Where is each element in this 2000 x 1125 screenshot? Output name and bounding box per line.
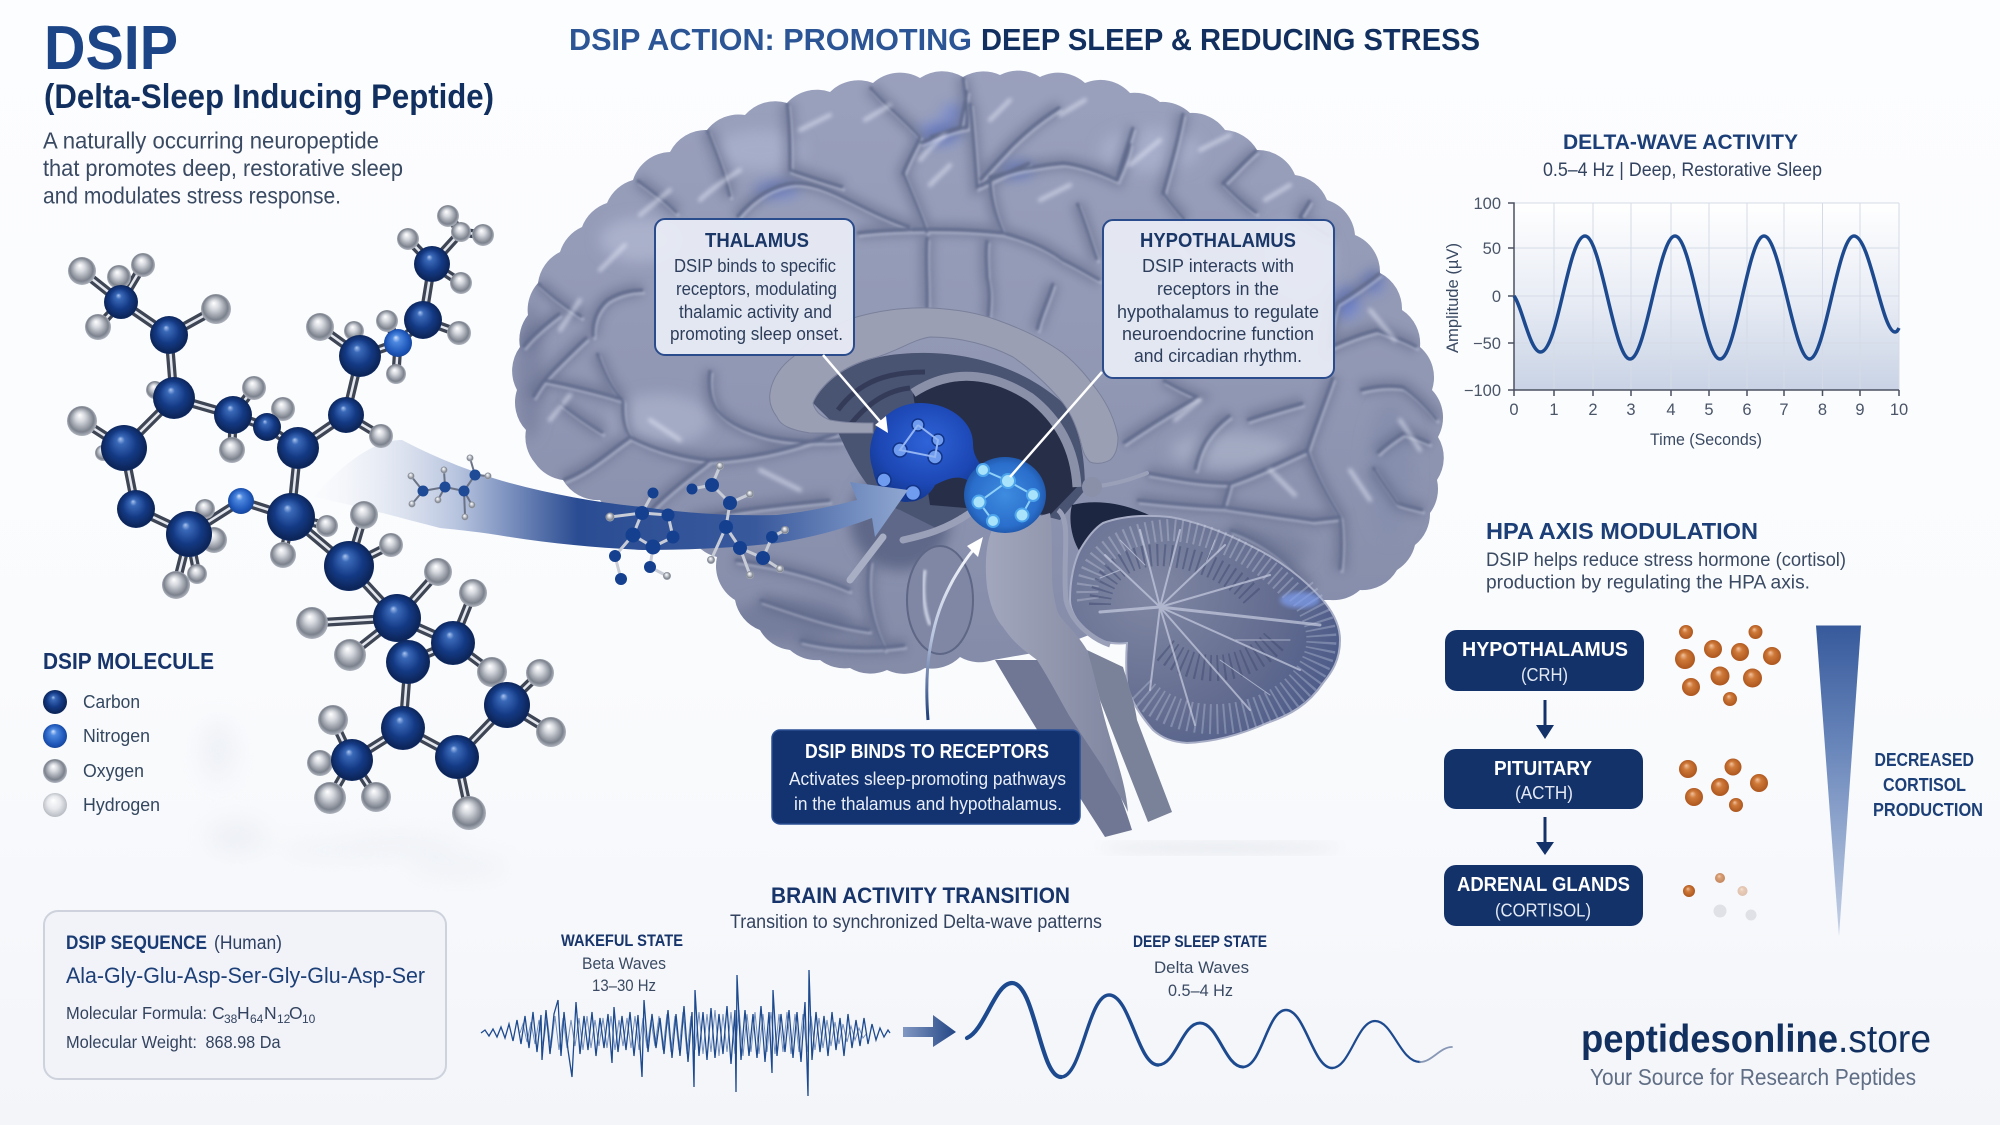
panel: delta-wave activity chart: DELTA-WAVE ACTIVITY [1563, 131, 1798, 154]
x-axis labels: 2 [1588, 401, 1598, 419]
main heading [569, 22, 1480, 57]
sulci depth shading [523, 77, 1437, 650]
wakeful state labels: 13–30 Hz [592, 976, 656, 995]
y-axis labels: −100 [1464, 382, 1501, 400]
brand logo: peptidesonline [1581, 1018, 1838, 1061]
inner chamber [913, 376, 1077, 515]
panel: molecule legend [43, 648, 214, 817]
pons [907, 546, 973, 654]
cerebellar ridges [1087, 530, 1321, 719]
x-axis labels: 8 [1818, 401, 1827, 419]
intro text: A naturally occurring neuropeptide [43, 128, 379, 154]
brainstem [986, 510, 1172, 837]
ventricle shading [838, 372, 925, 425]
brand logo: Your Source for Research Peptides [1590, 1064, 1916, 1090]
soft light and shade [516, 128, 1414, 642]
cerebrum [500, 60, 1460, 680]
optic tract [850, 473, 1147, 580]
panel: HPA axis: production by regulating the HPA axis. [1486, 572, 1810, 594]
panel: delta-wave activity chart: 0.5–4 Hz | Deep, Restorative Sleep [1543, 160, 1822, 181]
panel: sequence: N [264, 1003, 277, 1023]
x-axis labels: 10 [1890, 401, 1908, 419]
subtitle: full name: (Delta-Sleep Inducing Peptide) [44, 78, 494, 116]
cerebellum [1070, 516, 1340, 743]
decreased cortisol label [1873, 750, 1983, 820]
panel: sequence: 10 [302, 1012, 316, 1026]
thalamus binding site [870, 403, 985, 502]
y-axis labels: 0 [1492, 288, 1501, 306]
callout: DSIP binds to receptors: DSIP BINDS TO RECEPTORS [805, 741, 1049, 763]
box: adrenal glands [1444, 865, 1643, 926]
callout: hypothalamus: receptors in the [1157, 279, 1279, 299]
carbon atoms [101, 246, 530, 781]
y-axis labels: −50 [1473, 335, 1501, 353]
decreasing triangle [1816, 626, 1861, 936]
deep sleep state labels: Delta Waves [1154, 958, 1249, 977]
wakeful state labels: WAKEFUL STATE [561, 932, 683, 950]
callout: DSIP binds to receptors: Activates sleep-promoting pathways [789, 768, 1066, 789]
panel: brain activity transition [481, 883, 1452, 1096]
box: pituitary: PITUITARY [1494, 758, 1593, 780]
cerebellar blue sheen [1280, 592, 1320, 608]
callout: hypothalamus: and circadian rhythm. [1134, 346, 1302, 366]
panel: sequence: Ala-Gly-Glu-Asp-Ser-Gly-Glu-Asp-Ser [66, 963, 425, 988]
title block [43, 14, 494, 208]
panel: HPA axis: DSIP helps reduce stress hormone (cortisol) [1486, 550, 1846, 571]
x-axis labels: 4 [1666, 401, 1676, 419]
callout: thalamus: thalamic activity and [679, 302, 832, 322]
panel: sequence: Molecular Formula: [66, 1003, 207, 1023]
sulci lines [523, 77, 1437, 650]
panel: sequence: 868.98 Da [206, 1032, 281, 1052]
box: pituitary [1444, 749, 1643, 809]
panel: sequence: 12 [277, 1012, 291, 1026]
molecular bonds [82, 216, 551, 813]
wave line [1514, 236, 1899, 359]
callout: hypothalamus: hypothalamus to regulate [1117, 302, 1319, 322]
callout: thalamus: THALAMUS [705, 230, 809, 252]
soft shadows under molecule and brain [202, 720, 509, 875]
callout: DSIP binds to receptors: in the thalamus and hypothalamus. [794, 793, 1062, 814]
panel: sequence: C [212, 1003, 225, 1023]
cerebellar branches [1100, 530, 1320, 725]
panel: sequence: (Human) [214, 933, 282, 954]
callout: hypothalamus [1103, 220, 1334, 378]
callout: thalamus: receptors, modulating [676, 279, 837, 299]
panel: HPA axis [1444, 518, 1983, 936]
wakeful state labels: Beta Waves [582, 954, 666, 973]
small molecule on arrow 1 [408, 454, 492, 520]
panel: brain activity transition: BRAIN ACTIVITY TRANSITION [771, 883, 1070, 908]
panel: molecule legend: Oxygen [83, 761, 144, 781]
x-axis labels: 5 [1704, 401, 1714, 419]
deep sleep state labels [1133, 933, 1267, 1000]
dark ventricle [813, 353, 1085, 530]
decreased cortisol label: PRODUCTION [1873, 800, 1983, 820]
panel: molecule legend: Hydrogen [83, 795, 160, 815]
x-axis labels [1509, 401, 1908, 419]
decreased cortisol label: DECREASED [1874, 750, 1974, 770]
blue glow highlights [755, 105, 1383, 319]
callout: hypothalamus: HYPOTHALAMUS [1140, 230, 1296, 252]
panel: molecule legend: Carbon [83, 692, 140, 712]
x-axis labels: 9 [1855, 401, 1865, 419]
callout: thalamus [655, 219, 854, 355]
hydrogen and oxygen atoms [67, 205, 566, 830]
panel: sequence: 64 [250, 1012, 264, 1026]
panel: sequence: O [289, 1003, 303, 1023]
panel: sequence [44, 911, 446, 1079]
chiasm node [1082, 477, 1102, 497]
panel: delta-wave activity chart: Time (Seconds) [1650, 430, 1762, 449]
y-axis labels [1464, 195, 1501, 400]
decreased cortisol label: CORTISOL [1883, 775, 1966, 795]
delta wave [967, 983, 1452, 1077]
arrow: wake to sleep [903, 1015, 956, 1047]
x-axis labels: 0 [1509, 401, 1519, 419]
box: pituitary: (ACTH) [1515, 782, 1573, 803]
intro text [43, 128, 403, 208]
panel: sequence: 38 [224, 1012, 238, 1026]
box: hypothalamus [1445, 630, 1644, 691]
panel: delta-wave activity chart [1443, 131, 1908, 449]
x-axis labels: 6 [1742, 401, 1752, 419]
arrow: down 1 [1536, 700, 1554, 739]
gap behind brainstem [1070, 502, 1155, 552]
wakeful state labels [561, 932, 683, 995]
brand logo: .store [1838, 1018, 1931, 1061]
nitrogen atoms [228, 329, 412, 514]
box: hypothalamus: HYPOTHALAMUS [1462, 639, 1628, 661]
small molecules on arrow 2 [606, 462, 789, 585]
callout: thalamus: DSIP binds to specific [674, 256, 836, 276]
arrow: hypothalamus pointer [1010, 372, 1102, 477]
molecule model [67, 205, 566, 830]
arrow: receptors pointer [927, 537, 983, 720]
brand logo [1581, 1018, 1931, 1090]
callout: hypothalamus: neuroendocrine function [1122, 324, 1314, 344]
arrow: thalamus pointer [823, 355, 888, 433]
title: DSIP: DSIP [44, 14, 178, 83]
panel: sequence: H [237, 1003, 250, 1023]
box: adrenal glands: ADRENAL GLANDS [1457, 874, 1630, 896]
main heading: DSIP ACTION: PROMOTING [569, 22, 972, 57]
beta wave [481, 970, 890, 1096]
cortisol particles [1675, 625, 1781, 920]
arrow: peptide delivery to brain [314, 440, 908, 550]
corpus callosum [770, 308, 1118, 463]
x-axis labels: 7 [1779, 401, 1789, 419]
fornix ring [913, 376, 1077, 487]
box: hypothalamus: (CRH) [1521, 664, 1568, 685]
callout: hypothalamus: DSIP interacts with [1142, 256, 1294, 276]
main heading: DEEP SLEEP & REDUCING STRESS [981, 22, 1480, 57]
panel: HPA axis: HPA AXIS MODULATION [1486, 518, 1758, 544]
brain illustration [500, 60, 1460, 837]
panel: molecule legend: Nitrogen [83, 726, 150, 746]
panel: delta-wave activity chart: Amplitude (µV) [1443, 243, 1462, 353]
x-axis labels: 1 [1549, 401, 1559, 419]
specular highlights [550, 100, 1420, 500]
panel: sequence: DSIP SEQUENCE [66, 933, 207, 954]
y-axis labels: 50 [1483, 240, 1501, 258]
intro text: that promotes deep, restorative sleep [43, 155, 403, 181]
deep sleep state labels: DEEP SLEEP STATE [1133, 933, 1267, 951]
panel: brain activity transition: Transition to synchronized Delta-wave patterns [730, 912, 1102, 933]
callout: DSIP binds to receptors [772, 730, 1080, 824]
y-axis labels: 100 [1473, 195, 1501, 213]
floor shadow under brainstem [1100, 844, 1340, 852]
arrow: down 2 [1536, 817, 1554, 855]
deep sleep state labels: 0.5–4 Hz [1168, 981, 1233, 1000]
axes [1508, 203, 1899, 396]
hypothalamus binding site [964, 457, 1046, 533]
callout: thalamus: promoting sleep onset. [670, 324, 843, 344]
panel: molecule legend: DSIP MOLECULE [43, 648, 214, 674]
box: adrenal glands: (CORTISOL) [1495, 900, 1591, 920]
panel: sequence: Molecular Weight: [66, 1032, 197, 1052]
x-axis labels: 3 [1626, 401, 1636, 419]
sulci rim light [525, 80, 1439, 653]
intro text: and modulates stress response. [43, 182, 341, 208]
plot area [1514, 203, 1899, 390]
